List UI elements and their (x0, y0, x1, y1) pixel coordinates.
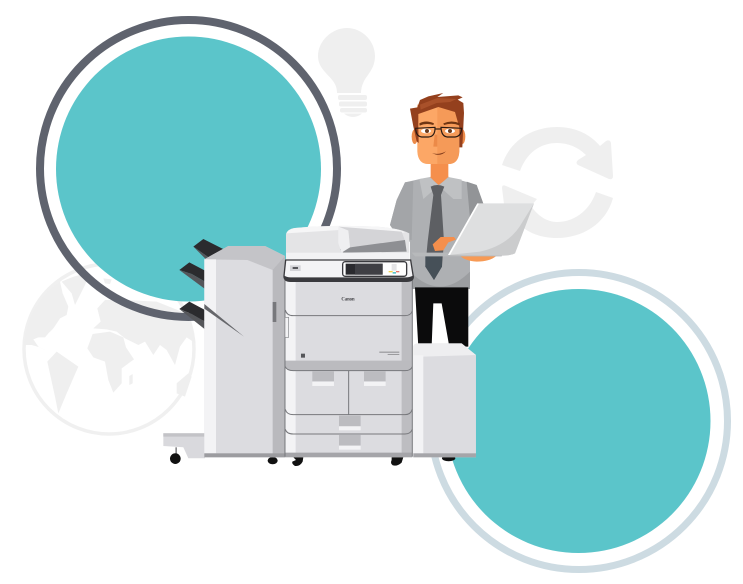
output trays (179, 239, 238, 329)
panel: left circle (40, 20, 337, 317)
glasses (416, 127, 462, 137)
main unit body (285, 277, 412, 457)
finisher base with caster (163, 433, 455, 466)
hand: under laptop (460, 256, 497, 262)
head (410, 93, 465, 164)
printer (163, 226, 476, 466)
panel: right circle (430, 272, 728, 570)
icon: light bulb (318, 28, 375, 117)
tie (425, 185, 444, 280)
shirt (390, 177, 483, 289)
icon: world globe (24, 264, 196, 434)
brand name: Canon (341, 297, 355, 302)
control panel (284, 260, 413, 281)
hand: typing (433, 237, 456, 251)
hair (410, 93, 464, 147)
paper drawer handles (312, 371, 386, 450)
scanner lid (286, 226, 409, 260)
laptop (412, 203, 534, 256)
finisher body (204, 246, 285, 457)
icon: refresh arrows (502, 127, 613, 238)
person: man with laptop (390, 93, 534, 289)
trousers (415, 287, 468, 347)
side paper deck (413, 343, 476, 457)
neck (425, 162, 454, 192)
eyes (421, 129, 455, 133)
brows (419, 121, 434, 126)
